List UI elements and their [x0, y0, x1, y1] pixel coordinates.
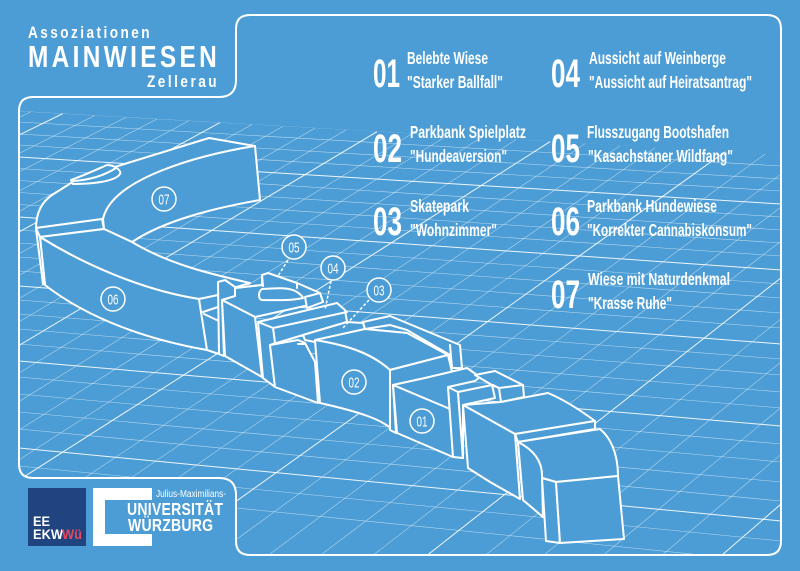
item 01: Belebte Wiese — [407, 48, 488, 68]
item 03 — [373, 196, 497, 244]
connector block — [199, 280, 236, 356]
marker 06: 06 — [108, 292, 118, 308]
zone 04 — [258, 303, 347, 387]
marker 04: 04 — [328, 260, 338, 278]
marker 07: 07 — [158, 192, 170, 208]
zone 07 — [36, 138, 260, 242]
item 03: 03 — [373, 200, 402, 244]
zone 06 — [36, 229, 250, 350]
logo: Universität Würzburg: UNIVERSITÄT — [127, 499, 223, 519]
item 05 — [551, 122, 733, 171]
item 07 — [551, 269, 730, 317]
title — [28, 24, 217, 91]
item 06 — [551, 196, 752, 244]
marker 01 — [410, 409, 434, 433]
logo: EEKWWü — [28, 488, 86, 546]
item 01 — [373, 48, 503, 96]
logo: EEKWWü: EE — [33, 513, 50, 529]
zone 01 — [390, 355, 480, 457]
item 05: Flusszugang Bootshafen — [587, 122, 729, 142]
marker 05 — [278, 235, 306, 276]
marker 01: 01 — [416, 414, 428, 430]
title: Zellerau — [147, 73, 217, 91]
item 07: "Krasse Ruhe" — [588, 293, 672, 313]
zone 02 — [270, 329, 448, 433]
legend — [373, 48, 752, 317]
item 02: 02 — [373, 127, 402, 171]
end blocks — [448, 371, 624, 543]
item 05: 05 — [551, 127, 580, 171]
item 04 — [551, 48, 752, 96]
item 03: Skatepark — [410, 196, 469, 216]
logo: Universität Würzburg — [93, 488, 226, 546]
zone 03 — [303, 316, 462, 368]
item 02: "Hundeaversion" — [410, 146, 507, 166]
item 07: 07 — [551, 273, 580, 317]
item 04: 04 — [551, 52, 580, 96]
river bank 3D model — [36, 138, 624, 543]
item 02 — [373, 122, 526, 171]
marker 03 — [342, 278, 391, 329]
marker 04 — [321, 256, 345, 310]
item 01: 01 — [373, 52, 400, 96]
logo: Universität Würzburg: WÜRZBURG — [128, 514, 213, 535]
item 03: "Wohnzimmer" — [410, 220, 497, 240]
item 05: "Kasachstaner Wildfang" — [588, 146, 733, 166]
marker 02 — [342, 370, 366, 394]
marker 05: 05 — [288, 240, 300, 256]
logo: Universität Würzburg: Julius-Maximilians- — [156, 489, 226, 500]
item 06: 06 — [551, 200, 580, 244]
logo: EEKWWü: Wü — [62, 526, 82, 542]
marker 07 — [152, 187, 176, 211]
item 02: Parkbank Spielplatz — [410, 122, 526, 142]
item 06: Parkbank Hundewiese — [587, 196, 717, 216]
item 04: Aussicht auf Weinberge — [589, 48, 726, 68]
callout markers — [101, 187, 434, 433]
marker 02: 02 — [348, 374, 360, 392]
title: MAINWIESEN — [28, 39, 217, 74]
item 01: "Starker Ballfall" — [407, 72, 503, 92]
zone 05 — [222, 273, 323, 377]
logo: EEKWWü: EKW — [33, 526, 64, 542]
title: Assoziationen — [28, 24, 150, 42]
marker 06 — [101, 287, 125, 311]
perspective grid — [10, 111, 790, 563]
item 07: Wiese mit Naturdenkmal — [588, 269, 730, 289]
marker 03: 03 — [374, 282, 384, 300]
